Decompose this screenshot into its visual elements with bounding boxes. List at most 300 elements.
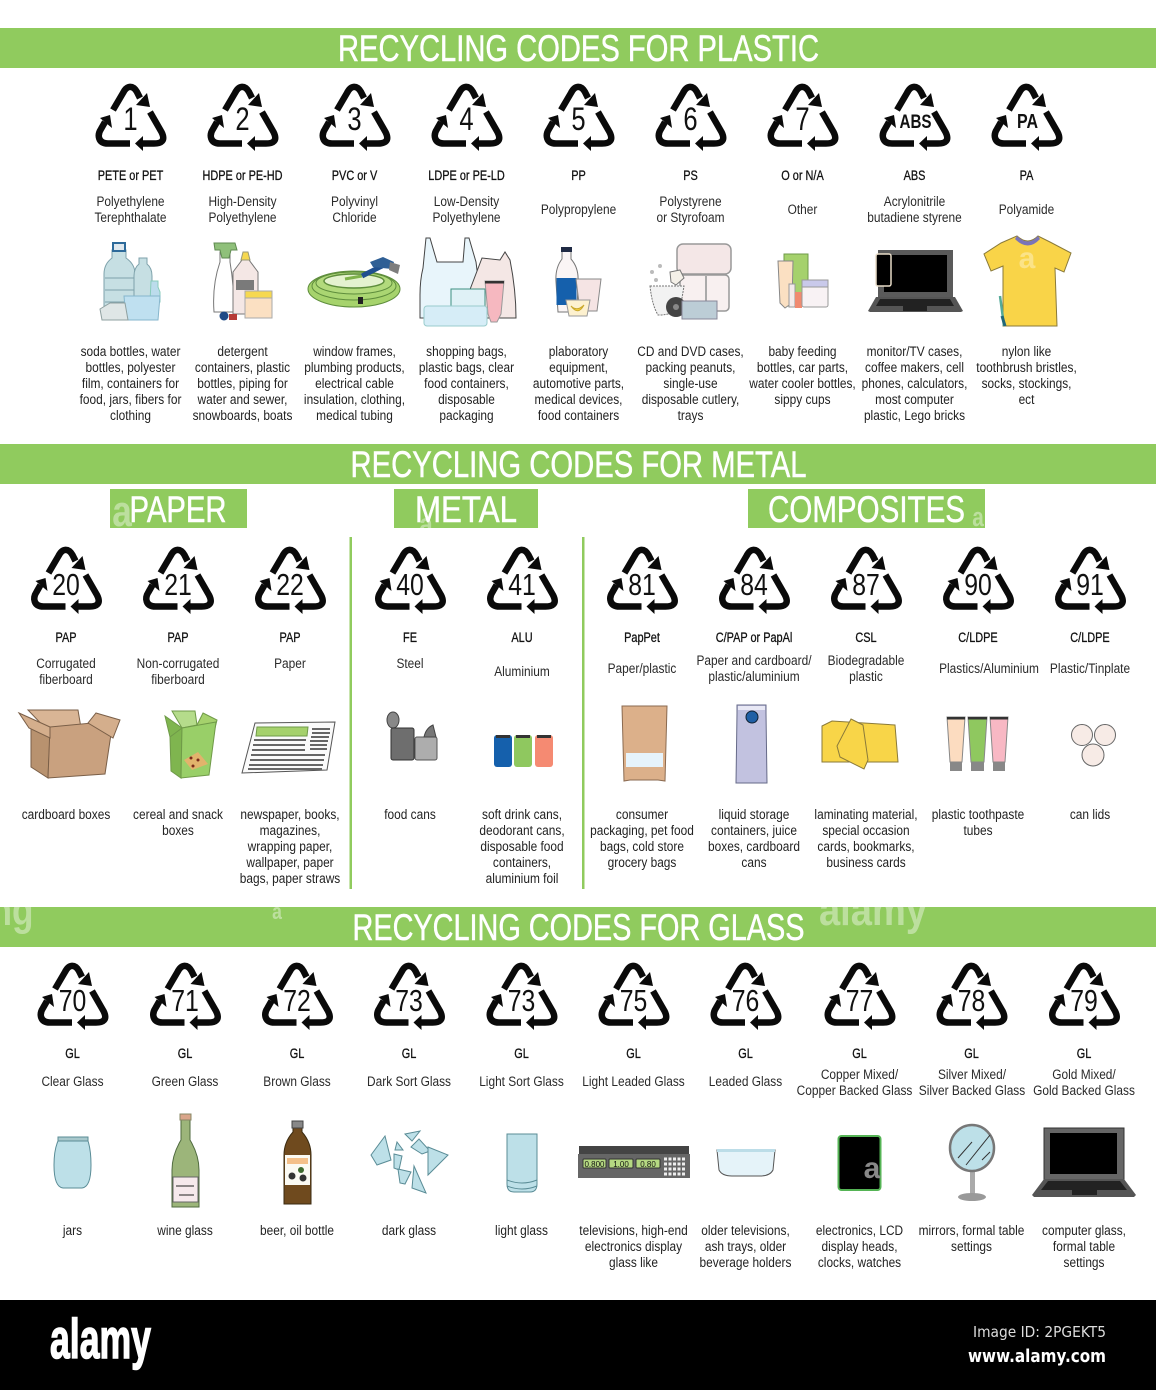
icon: glass bowl: [717, 1149, 775, 1176]
text: aluminium uses: deodorant cans,: [479, 822, 565, 838]
icon: recycling symbol 76: [714, 966, 778, 1030]
icon: recycling symbol 3: [323, 87, 387, 151]
column: code 73 light: [479, 966, 564, 1238]
text: paper uses: magazines,: [260, 822, 320, 838]
text: paper and cardboard: plastic/aluminium: [708, 668, 800, 684]
column: code 3 PVC: [304, 87, 405, 423]
icon: wine bottle: [172, 1114, 199, 1207]
text: tablet uses: electronics, LCD: [816, 1222, 903, 1238]
text: paper uses: wrapping paper,: [247, 838, 332, 854]
icon: recycling symbol 81: [610, 550, 675, 614]
column: code 7 other: [748, 87, 856, 407]
text: tablet uses: clocks, watches: [818, 1254, 902, 1270]
column: code 41: [479, 550, 565, 886]
icon: recycling symbol 78: 78: [958, 983, 985, 1018]
text: PS uses: single-use: [663, 375, 718, 391]
text: pouch uses: packaging, pet food: [590, 822, 694, 838]
text: brown glass: Brown Glass: [263, 1073, 331, 1089]
subheading: metal: a: [419, 506, 433, 541]
text: leaded uses: electronics display: [585, 1238, 683, 1254]
text: PS uses: trays: [678, 407, 704, 423]
icon: recycling symbol 20: 20: [52, 567, 80, 602]
icon: tablet: a: [864, 1152, 881, 1185]
icon: recycling symbol 79: [1052, 966, 1117, 1030]
text: other uses: bottles, car parts,: [757, 359, 848, 375]
icon: recycling symbol 21: [146, 550, 211, 614]
text: leaded uses: [579, 1222, 688, 1270]
text: green glass: Green Glass: [152, 1073, 219, 1089]
text: paper and cardboard: [696, 652, 812, 684]
label: PAP: PAP: [167, 630, 189, 645]
text: leaded uses: glass like: [609, 1254, 658, 1270]
column: code 2 HDPE: [193, 87, 293, 423]
text: PP uses: automotive parts,: [533, 375, 624, 391]
column: code 1 PET: [80, 87, 182, 423]
text: ABS uses: monitor/TV cases,: [867, 343, 962, 359]
label: GL: GL: [1077, 1046, 1091, 1061]
text: laptop uses: [1042, 1222, 1126, 1270]
text: pouch uses: grocery bags: [608, 854, 677, 870]
icon: recycling symbol 90: [946, 550, 1011, 614]
column: code 22: [240, 550, 341, 886]
label: O or N/A: O or N/A: [781, 168, 824, 183]
icon: cardboard box: [19, 710, 120, 778]
icon: recycling symbol 77: 77: [846, 983, 873, 1018]
icon: recycling symbol 76: 76: [732, 983, 759, 1018]
icon: water bottles and tubs: [100, 243, 160, 320]
label: GL: GL: [852, 1046, 867, 1061]
text: other uses: water cooler bottles,: [748, 375, 856, 391]
icon: recycling symbol 73: [377, 966, 442, 1030]
text: plastics/aluminium: Plastics/Aluminium: [939, 660, 1039, 676]
text: HDPE uses: water and sewer,: [197, 391, 287, 407]
text: paper uses: [240, 806, 341, 886]
subheading: paper: PAPER: [130, 489, 226, 530]
text: non-corrugated fiberboard: [137, 655, 219, 687]
icon: recycling symbol 41: 41: [508, 567, 536, 602]
text: other uses: baby feeding: [768, 343, 837, 359]
text: tube uses: tubes: [963, 822, 993, 838]
icon: toothpaste tubes: [947, 717, 1008, 771]
text: light sort glass: Light Sort Glass: [479, 1073, 564, 1089]
text: PVC uses: medical tubing: [316, 407, 393, 423]
text: PET uses: soda bottles, water: [81, 343, 181, 359]
text: non-corrugated fiberboard: fiberboard: [151, 671, 205, 687]
text: PVC uses: [304, 343, 405, 423]
text: PET uses: clothing: [110, 407, 151, 423]
icon: recycling symbol 4: 4: [459, 102, 474, 138]
icon: electronic display scale: [578, 1146, 690, 1178]
text: PVC uses: insulation, clothing,: [304, 391, 405, 407]
text: tube uses: plastic toothpaste: [932, 806, 1024, 822]
label: GL: GL: [290, 1046, 304, 1061]
icon: recycling symbol 73: 73: [395, 983, 423, 1018]
text: acrylonitrile butadiene styrene: butadiene styrene: [867, 209, 962, 225]
icon: recycling symbol 70: 70: [59, 983, 86, 1018]
column: code 73 dark: [367, 966, 451, 1238]
icon: recycling symbol 41: [490, 550, 555, 614]
label: PS: PS: [683, 168, 698, 183]
icon: recycling symbol 72: [265, 966, 330, 1030]
text: high-density polyethylene: High-Density: [208, 193, 277, 209]
subheading: metal: METAL: [415, 489, 517, 530]
text: light leaded glass: Light Leaded Glass: [582, 1073, 685, 1089]
text: PP uses: [533, 343, 624, 423]
text: corrugated fiberboard: fiberboard: [39, 671, 93, 687]
text: biodegradable plastic: [828, 652, 904, 684]
text: ABS uses: most computer: [875, 391, 954, 407]
icon: soda cans: [494, 735, 553, 767]
text: steel uses: food cans: [384, 806, 436, 822]
icon: cereal box: [165, 711, 217, 778]
text: sheets uses: cards, bookmarks,: [817, 838, 915, 854]
text: PS uses: packing peanuts,: [646, 359, 735, 375]
label: GL: GL: [964, 1046, 979, 1061]
icon: recycling symbol 20: [34, 550, 99, 614]
label: C/LDPE: C/LDPE: [1070, 630, 1110, 645]
label: FE: FE: [403, 630, 417, 645]
heading: recycling codes for plastic: [0, 28, 1156, 69]
text: image id: Image ID: 2PGEKT5: [973, 1323, 1106, 1341]
text: laptop uses: formal table: [1053, 1238, 1115, 1254]
text: corrugated fiberboard: [36, 655, 96, 687]
icon: recycling symbol 7: 7: [795, 102, 810, 138]
label: GL: GL: [738, 1046, 753, 1061]
text: copper mixed: [797, 1066, 913, 1098]
text: cereal uses: cereal and snack: [133, 806, 223, 822]
icon: detergent containers: [214, 243, 272, 320]
text: gold mixed: Gold Backed Glass: [1033, 1082, 1135, 1098]
icon: garden hose: [308, 257, 400, 307]
text: PET uses: [80, 343, 182, 423]
icon: drinking glass: [507, 1134, 537, 1192]
icon: oil bottle: [284, 1121, 311, 1204]
text: corrugated fiberboard: Corrugated: [36, 655, 96, 671]
label: PVC: PVC or V: [332, 168, 378, 183]
text: cereal uses: [133, 806, 223, 838]
text: leaded uses: televisions, high-end: [579, 1222, 688, 1238]
text: light glass uses: light glass: [495, 1222, 548, 1238]
panel: metal, paper and composites: [0, 444, 1156, 889]
text: mirror uses: mirrors, formal table: [919, 1222, 1024, 1238]
icon: recycling symbol 87: [834, 550, 899, 614]
text: ABS uses: [862, 343, 967, 423]
text: polyethylene terephthalate: [94, 193, 167, 225]
column: code 77: [797, 966, 913, 1270]
icon: can lids: [1072, 724, 1116, 766]
heading: recycling codes for glass: alamy: [819, 886, 927, 935]
column: code 90: [932, 550, 1039, 838]
text: jar uses: jars: [62, 1222, 83, 1238]
icon: recycling symbol 75: 75: [620, 983, 647, 1018]
icon: recycling symbol PA: PA: [1017, 110, 1038, 132]
text: polyvinyl chloride: Chloride: [332, 209, 377, 225]
icon: recycling symbol 1: 1: [123, 102, 138, 138]
text: ABS uses: phones, calculators,: [862, 375, 967, 391]
icon: recycling symbol 81: 81: [628, 567, 656, 602]
text: PVC uses: window frames,: [312, 343, 396, 359]
column: code 72: [260, 966, 334, 1238]
text: PS uses: CD and DVD cases,: [637, 343, 744, 359]
icon: recycling symbol 91: [1058, 550, 1123, 614]
text: HDPE uses: snowboards, boats: [193, 407, 293, 423]
text: copper mixed: Copper Mixed/: [821, 1066, 899, 1082]
column: PA: [976, 87, 1077, 407]
icon: recycling symbol 5: [547, 87, 611, 151]
icon: recycling symbol 4: [435, 87, 499, 151]
text: bowl uses: ash trays, older: [705, 1238, 787, 1254]
icon: recycling symbol 1: [99, 87, 163, 151]
icon: recycling symbol ABS: [883, 87, 947, 151]
text: other: Other: [788, 201, 818, 217]
text: PET uses: food, jars, fibers for: [80, 391, 182, 407]
icon: recycling symbol PA: [995, 87, 1059, 151]
icon: recycling symbol 40: 40: [396, 567, 424, 602]
text: polyamide: Polyamide: [999, 201, 1054, 217]
label: LDPE: LDPE or PE-LD: [428, 168, 505, 183]
text: paper uses: wallpaper, paper: [245, 854, 334, 870]
icon: t-shirt and toothbrush: a: [1019, 242, 1036, 275]
text: PA uses: socks, stockings,: [982, 375, 1071, 391]
text: shard uses: dark glass: [382, 1222, 437, 1238]
text: pouch uses: consumer: [616, 806, 669, 822]
text: PA uses: ect: [1019, 391, 1035, 407]
text: box uses: cardboard boxes: [22, 806, 111, 822]
text: pouch uses: bags, cold store: [600, 838, 684, 854]
text: mirror uses: [919, 1222, 1024, 1254]
icon: recycling symbol 73: 73: [508, 983, 535, 1018]
icon: jar: [54, 1137, 91, 1188]
subheading: paper: a: [112, 487, 133, 536]
subheading: metal: [394, 489, 538, 541]
text: ABS uses: coffee makers, cell: [865, 359, 964, 375]
icon: recycling symbol 5: 5: [571, 102, 586, 138]
panel: glass: [0, 886, 1156, 1270]
label: CSL: CSL: [855, 630, 877, 645]
text: cereal uses: boxes: [162, 822, 194, 838]
text: website: www.alamy.com: [968, 1346, 1106, 1367]
text: PA uses: [976, 343, 1077, 407]
text: other uses: [748, 343, 856, 407]
column: code 5 PP: [533, 87, 624, 423]
icon: laptop: [1032, 1128, 1136, 1197]
column: code 87: [814, 550, 918, 870]
text: gold mixed: [1033, 1066, 1135, 1098]
text: LDPE uses: packaging: [439, 407, 494, 423]
text: laptop uses: computer glass,: [1042, 1222, 1126, 1238]
column: code 91: [1050, 550, 1130, 822]
column: code 84: [696, 550, 812, 870]
icon: recycling symbol 40: [378, 550, 443, 614]
icon: tablet: [838, 1136, 881, 1190]
footer: image credit bar: [0, 1300, 1156, 1390]
text: acrylonitrile butadiene styrene: [867, 193, 962, 225]
icon: plastic bags and film: [420, 238, 516, 326]
heading: recycling codes for glass: a: [272, 900, 283, 925]
label: PET: PETE or PET: [98, 168, 164, 183]
text: tube uses: [932, 806, 1024, 838]
text: silver mixed: [919, 1066, 1026, 1098]
icon: recycling symbol 78: [940, 966, 1004, 1030]
column: code 78: [919, 966, 1026, 1254]
text: HDPE uses: bottles, piping for: [197, 375, 288, 391]
icon: recycling symbol 21: 21: [164, 567, 192, 602]
text: carton uses: [708, 806, 800, 870]
text: LDPE uses: disposable: [438, 391, 495, 407]
icon: recycling symbol 22: [258, 550, 323, 614]
column: code 20: [19, 550, 120, 822]
icon: recycling symbol 72: 72: [283, 983, 311, 1018]
icon: t-shirt and toothbrush: [984, 236, 1071, 326]
subheading: composites: a: [972, 503, 985, 532]
logo: alamy: alamy: [50, 1307, 151, 1370]
label: GL: GL: [65, 1046, 80, 1061]
icon: recycling symbol 71: 71: [171, 983, 199, 1018]
label: GL: GL: [178, 1046, 192, 1061]
text: PS uses: disposable cutlery,: [642, 391, 739, 407]
text: low-density polyethylene: Low-Density: [434, 193, 500, 209]
panel: plastic: [0, 28, 1156, 423]
text: clear glass: Clear Glass: [41, 1073, 104, 1089]
label: C/LDPE: C/LDPE: [958, 630, 998, 645]
icon: recycling symbol 6: [659, 87, 723, 151]
text: gold mixed: Gold Mixed/: [1052, 1066, 1116, 1082]
label: GL: GL: [402, 1046, 416, 1061]
text: non-corrugated fiberboard: Non-corrugated: [137, 655, 219, 671]
text: tablet uses: [816, 1222, 903, 1270]
icon: recycling symbol 87: 87: [852, 567, 880, 602]
text: biodegradable plastic: Biodegradable: [828, 652, 904, 668]
icon: newspaper: [242, 722, 335, 773]
label: ALU: ALU: [511, 630, 533, 645]
text: LDPE uses: shopping bags,: [426, 343, 507, 359]
icon: recycling symbol 73: [490, 966, 554, 1030]
label: PAP: PAP: [279, 630, 301, 645]
text: HDPE uses: [193, 343, 293, 423]
heading: recycling codes for glass: RECYCLING CODES FOR GLASS: [352, 907, 804, 948]
text: PP uses: food containers: [538, 407, 620, 423]
label: ABS: ABS: [904, 168, 925, 183]
text: mirror uses: settings: [951, 1238, 992, 1254]
icon: recycling symbol 90: 90: [964, 567, 992, 602]
text: sheets uses: [814, 806, 918, 870]
text: polyvinyl chloride: [331, 193, 378, 225]
icon: milk bottle and cups: [556, 247, 601, 316]
icon: recycling symbol 3: 3: [347, 102, 362, 138]
text: HDPE uses: detergent: [217, 343, 268, 359]
text: paper and cardboard: Paper and cardboard/: [696, 652, 812, 668]
icon: recycling symbol 6: 6: [683, 102, 698, 138]
text: lid uses: can lids: [1070, 806, 1111, 822]
text: PP uses: medical devices,: [535, 391, 622, 407]
icon: juice carton: [736, 705, 767, 783]
text: PET uses: film, containers for: [82, 375, 180, 391]
icon: packing and CD cases: [650, 244, 731, 319]
text: polyethylene terephthalate: Polyethylene: [96, 193, 165, 209]
icon: recycling symbol 2: 2: [235, 102, 250, 138]
icon: electronic display scale: 0.800: [584, 1160, 605, 1169]
text: laptop uses: settings: [1064, 1254, 1105, 1270]
label: GL: GL: [514, 1046, 529, 1061]
text: PVC uses: plumbing products,: [304, 359, 405, 375]
text: polystyrene or styrofoam: [656, 193, 725, 225]
text: polyvinyl chloride: Polyvinyl: [331, 193, 378, 209]
column: code 40: [378, 550, 443, 822]
text: aluminium uses: containers,: [493, 854, 551, 870]
text: PVC uses: electrical cable: [315, 375, 394, 391]
icon: recycling symbol 7: [771, 87, 835, 151]
label: PP: PP: [571, 168, 586, 183]
text: LDPE uses: food containers,: [424, 375, 509, 391]
label: HDPE: HDPE or PE-HD: [202, 168, 283, 183]
column: code 4 LDPE: [419, 87, 516, 423]
text: aluminium uses: disposable food: [480, 838, 564, 854]
column: code 71: [152, 966, 219, 1238]
text: paper: Paper: [274, 655, 306, 671]
column: code 21: [133, 550, 223, 838]
icon: recycling symbol 22: 22: [276, 567, 304, 602]
text: bowl uses: beverage holders: [700, 1254, 792, 1270]
text: PS uses: [637, 343, 744, 423]
heading: recycling codes for plastic: RECYCLING CODES FOR PLASTIC: [338, 28, 819, 69]
text: low-density polyethylene: Polyethylene: [432, 209, 501, 225]
text: aluminium uses: aluminium foil: [486, 870, 558, 886]
icon: recycling symbol 71: [153, 966, 218, 1030]
icon: baby bottles and tubes: [778, 254, 828, 308]
text: copper mixed: Copper Backed Glass: [797, 1082, 913, 1098]
icon: table mirror: [950, 1125, 994, 1201]
icon: steel food cans: [387, 712, 437, 760]
column: ABS: [862, 87, 967, 423]
column: code 75: [578, 966, 690, 1270]
text: carton uses: liquid storage: [719, 806, 789, 822]
text: high-density polyethylene: [208, 193, 277, 225]
heading: recycling codes for glass: [0, 886, 1156, 948]
text: carton uses: containers, juice: [711, 822, 797, 838]
column: code 6 PS: [637, 87, 744, 423]
icon: recycling symbol 79: 79: [1070, 983, 1098, 1018]
text: polypropylene: Polypropylene: [541, 201, 616, 217]
text: polystyrene or styrofoam: or Styrofoam: [656, 209, 725, 225]
label: C/PAP: C/PAP or PapAl: [716, 630, 792, 645]
text: polyethylene terephthalate: Terephthalate: [94, 209, 167, 225]
text: paper/plastic: Paper/plastic: [608, 660, 677, 676]
column: code 70: [41, 966, 105, 1238]
text: silver mixed: Silver Mixed/: [938, 1066, 1006, 1082]
icon: electronic display scale: 0.80: [640, 1160, 656, 1169]
text: high-density polyethylene: Polyethylene: [208, 209, 277, 225]
text: PP uses: plaboratory: [549, 343, 609, 359]
text: pouch uses: [590, 806, 694, 870]
icon: recycling symbol 75: [602, 966, 666, 1030]
text: oil uses: beer, oil bottle: [260, 1222, 334, 1238]
text: polystyrene or styrofoam: Polystyrene: [659, 193, 722, 209]
icon: recycling symbol 77: [828, 966, 892, 1030]
label: GL: GL: [626, 1046, 641, 1061]
text: leaded glass: Leaded Glass: [709, 1073, 783, 1089]
text: carton uses: boxes, cardboard: [708, 838, 800, 854]
text: bowl uses: older televisions,: [701, 1222, 790, 1238]
icon: recycling symbol 70: [41, 966, 105, 1030]
text: acrylonitrile butadiene styrene: Acrylonitrile: [884, 193, 945, 209]
icon: recycling symbol 84: 84: [740, 567, 768, 602]
label: PapPet: PapPet: [624, 630, 660, 645]
text: LDPE uses: plastic bags, clear: [419, 359, 515, 375]
icon: recycling symbol 2: [211, 87, 275, 151]
text: PP uses: equipment,: [549, 359, 608, 375]
text: aluminium uses: soft drink cans,: [482, 806, 562, 822]
text: aluminium: Aluminium: [494, 663, 550, 679]
